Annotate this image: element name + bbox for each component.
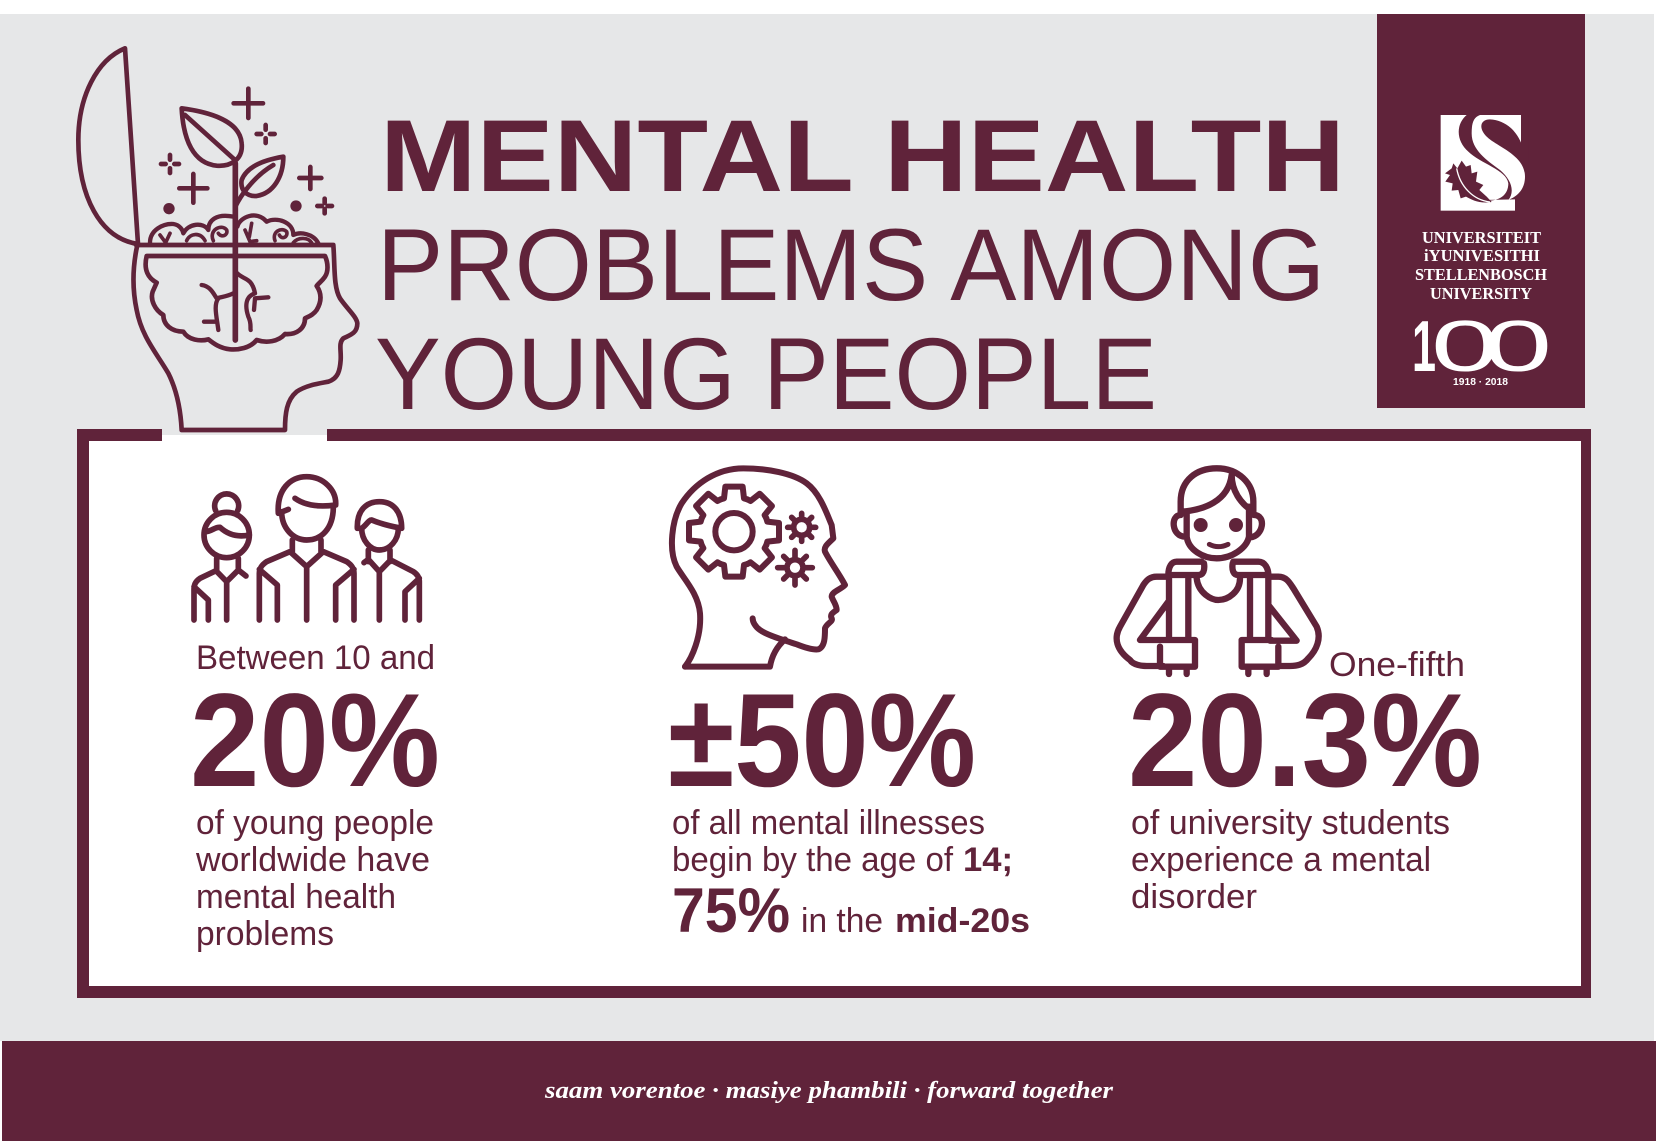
- footer motto: saam vorentoe · masiye phambili · forward together: [544, 1078, 1114, 1104]
- logo text: [1415, 228, 1547, 303]
- column: age of onset: [668, 468, 1030, 946]
- centenary mark: 100: 1: [1412, 307, 1436, 387]
- lead-in text: One-fifth: [1329, 646, 1465, 684]
- centenary mark: 100: 0: [1431, 307, 1499, 387]
- description: in the: [801, 902, 883, 940]
- icon: S shield with oak leaf: [1441, 115, 1528, 211]
- logo text: STELLENBOSCH: [1415, 265, 1547, 284]
- description: experience a mental: [1131, 841, 1431, 879]
- logo text: UNIVERSITEIT: [1422, 228, 1541, 247]
- footer band: [2, 1041, 1656, 1141]
- description: 75%: [672, 876, 790, 946]
- title line: Young People: YOUNG PEOPLE: [375, 317, 1157, 431]
- statistic: 20.3%: 20.3%: [1128, 667, 1482, 815]
- description: mental health: [196, 878, 396, 916]
- description: of university students: [1131, 804, 1450, 842]
- icon: three people: [194, 477, 419, 620]
- statistic: 50%: ±50%: [668, 667, 976, 815]
- description: disorder: [1131, 878, 1257, 916]
- title line: Mental Health: MENTAL HEALTH: [380, 99, 1345, 213]
- description: [195, 804, 434, 953]
- panel: statistics frame: [77, 429, 1591, 998]
- title: [375, 99, 1345, 431]
- logo text: iYUNIVESITHI: [1424, 246, 1540, 265]
- description: worldwide have: [195, 841, 430, 879]
- lead-in text: Between 10 and: [196, 639, 435, 677]
- icon: student with backpack: [1117, 468, 1319, 674]
- statistic: 20%: 20%: [190, 667, 440, 815]
- description: mid-20s: [895, 902, 1030, 940]
- centenary mark: 100: [1412, 307, 1552, 388]
- column: young people: [190, 477, 440, 953]
- title line: Problems Among: PROBLEMS AMONG: [377, 208, 1325, 322]
- icon: open head with growing plant: [78, 48, 357, 430]
- description: of young people: [196, 804, 434, 842]
- description: [1131, 804, 1450, 916]
- description: 14;: [963, 841, 1013, 879]
- column: university students: [1117, 468, 1482, 916]
- description: problems: [196, 915, 334, 953]
- centenary mark: 100: 0: [1484, 307, 1552, 387]
- description: [672, 804, 1030, 946]
- description: of all mental illnesses: [672, 804, 985, 842]
- centenary mark: 100: 1918 · 2018: [1453, 377, 1508, 388]
- panel: university logo: [1377, 14, 1585, 408]
- description: begin by the age of: [672, 841, 954, 879]
- icon: head with gears: [672, 468, 845, 667]
- logo text: UNIVERSITY: [1430, 284, 1532, 303]
